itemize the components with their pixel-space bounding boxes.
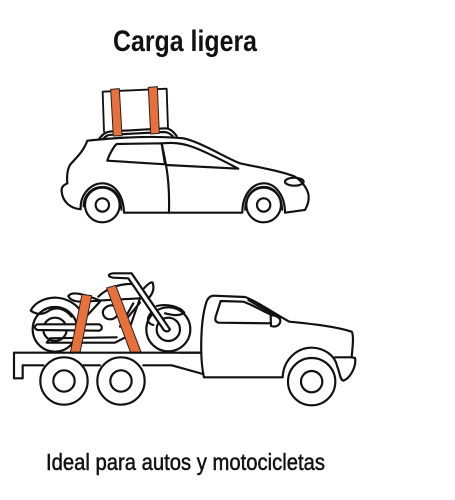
headlamp <box>144 282 153 298</box>
rear hub <box>43 318 67 341</box>
front strap <box>107 285 141 353</box>
front fender <box>148 305 184 325</box>
rear side window <box>107 143 165 164</box>
door line <box>162 143 169 213</box>
engine and frame <box>47 298 140 343</box>
car body <box>62 137 309 213</box>
headlight <box>285 178 304 186</box>
caption: Ideal para autos y motocicletas <box>46 449 325 475</box>
handlebar and fork <box>109 273 170 331</box>
bed line <box>180 349 201 356</box>
trailer wheel 1 <box>40 357 88 405</box>
illustration: car with roof load <box>62 87 309 222</box>
rear wheel <box>33 307 77 352</box>
seat <box>68 293 100 302</box>
front side window <box>163 143 238 169</box>
cab and hood <box>201 296 355 381</box>
orange straps <box>111 87 159 136</box>
rear strap <box>70 294 92 353</box>
title: Carga ligera <box>113 25 257 58</box>
rear fender <box>31 298 80 317</box>
fuel tank <box>98 284 142 298</box>
rear wheel <box>85 188 120 222</box>
front wheel <box>146 307 190 351</box>
roof load box <box>103 89 168 132</box>
truck front wheel <box>288 358 335 405</box>
front hub <box>157 318 180 341</box>
wheel arch inner lines <box>83 187 282 210</box>
truck <box>180 296 355 405</box>
motorcycle and trailer <box>14 273 203 405</box>
illustration: motorcycle on flatbed truck <box>14 273 355 405</box>
exhaust <box>35 324 102 331</box>
flatbed <box>14 353 203 378</box>
windshield line <box>248 300 352 357</box>
mirror <box>271 315 280 326</box>
window <box>215 301 272 323</box>
roof rack <box>99 128 177 139</box>
front wheel <box>246 188 281 222</box>
trailer wheel 2 <box>97 357 145 405</box>
